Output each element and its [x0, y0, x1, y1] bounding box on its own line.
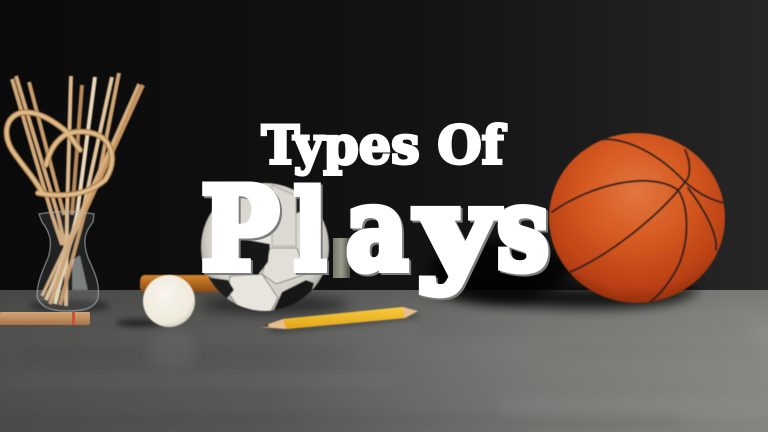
icon: metal cylinder	[333, 238, 350, 278]
icon: sticks and rope in glass vase	[7, 73, 143, 311]
title line shadow: Plays: l	[296, 169, 328, 297]
glass vase	[37, 212, 99, 311]
icon: yellow pencil	[260, 307, 418, 329]
title line shadow: Plays	[203, 164, 551, 298]
title line shadow: Plays: a	[348, 164, 410, 298]
title line shadow: Plays: s	[499, 164, 551, 298]
title	[201, 116, 551, 298]
sticks	[12, 73, 143, 306]
shadows on wall and table	[30, 240, 700, 334]
title line: Types Of: Types Of	[262, 116, 507, 176]
title line shadow: Plays: y	[417, 164, 501, 298]
background wall	[0, 0, 768, 291]
title line shadow: Plays: P	[203, 164, 281, 298]
rope	[7, 112, 112, 195]
table surface	[0, 290, 768, 432]
icon: soccer ball	[200, 183, 329, 313]
title line: Plays: y	[415, 162, 499, 296]
title line: Plays: l	[294, 167, 326, 295]
title line: Plays	[201, 162, 549, 296]
title line: Plays: s	[497, 162, 549, 296]
ball reflection on table	[148, 332, 196, 368]
icon: wooden stick	[0, 312, 90, 325]
title line: Plays: a	[346, 162, 408, 296]
title line: Plays: P	[201, 162, 279, 296]
icon: basketball	[549, 133, 725, 303]
icon: white ball	[143, 275, 195, 327]
icon: bat behind balls	[140, 275, 222, 292]
